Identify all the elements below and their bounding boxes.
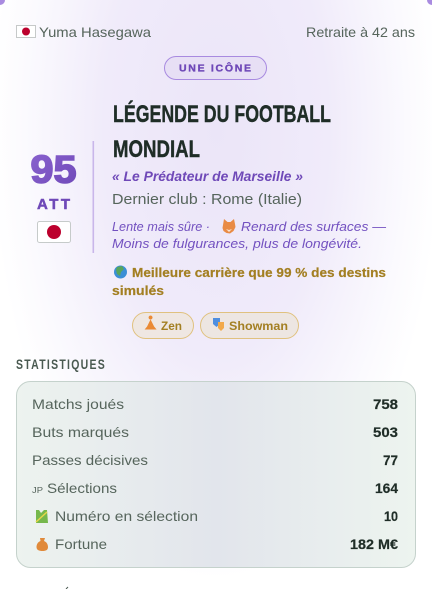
title: LÉGENDE DU FOOTBALL [113,100,331,128]
stat values: 503 [373,424,398,440]
stats panel [16,382,416,568]
section heading: statistiques: STATISTIQUES [16,357,106,372]
row: numéro en sélection: Numéro en sélection [55,508,198,524]
career comparison: simulés [112,283,164,298]
career comparison: Meilleure carrière que 99 % des destins [132,265,386,280]
icon: meditation [145,316,157,330]
stat values: 77 [383,452,398,468]
stat values: 182 M€ [350,536,398,552]
divider [92,141,94,253]
badge: une icône: UNE ICÔNE [179,62,251,74]
badge: une icône [164,56,266,80]
row: fortune [36,536,107,552]
stat values: 10 [384,508,398,524]
nickname: « Le Prédateur de Marseille » [112,168,303,184]
flag: Japan [38,222,70,242]
last club: Dernier club : Rome (Italie) [112,192,302,208]
rating block [30,148,76,242]
row: passes décisives: Passes décisives [32,452,148,468]
trait chip: Showman [200,312,298,338]
career comparison [112,265,386,298]
header: player name with flag: Yuma Hasegawa [39,24,151,40]
row: buts marqués: Buts marqués [32,424,129,440]
header: retirement age: Retraite à 42 ans [306,24,415,40]
icon: fox [222,219,236,234]
description: Moins de fulgurances, plus de longévité. [112,237,362,251]
title: MONDIAL [113,136,200,163]
icon: theatre masks [213,318,224,331]
stat values: 758 [373,396,398,412]
description [112,219,387,251]
description: Renard des surfaces — [241,220,387,234]
next section heading, cropped [66,587,68,589]
description: Lente mais sûre · [112,220,210,234]
stat values: 164 [375,480,398,496]
trait chip: Zen [132,312,194,338]
title [113,100,331,163]
row: matchs joués: Matchs joués [32,396,124,412]
stat values [350,396,398,552]
trait chip: Zen: Zen [161,321,182,333]
position: ATT [37,196,70,213]
row: sélections: Sélections [47,480,117,496]
row: fortune: Fortune [55,536,107,552]
rating number: 95 [30,148,76,192]
row: sélections: JP [32,485,43,495]
trait chip: Showman: Showman [229,321,288,333]
icon: globe [114,266,127,278]
